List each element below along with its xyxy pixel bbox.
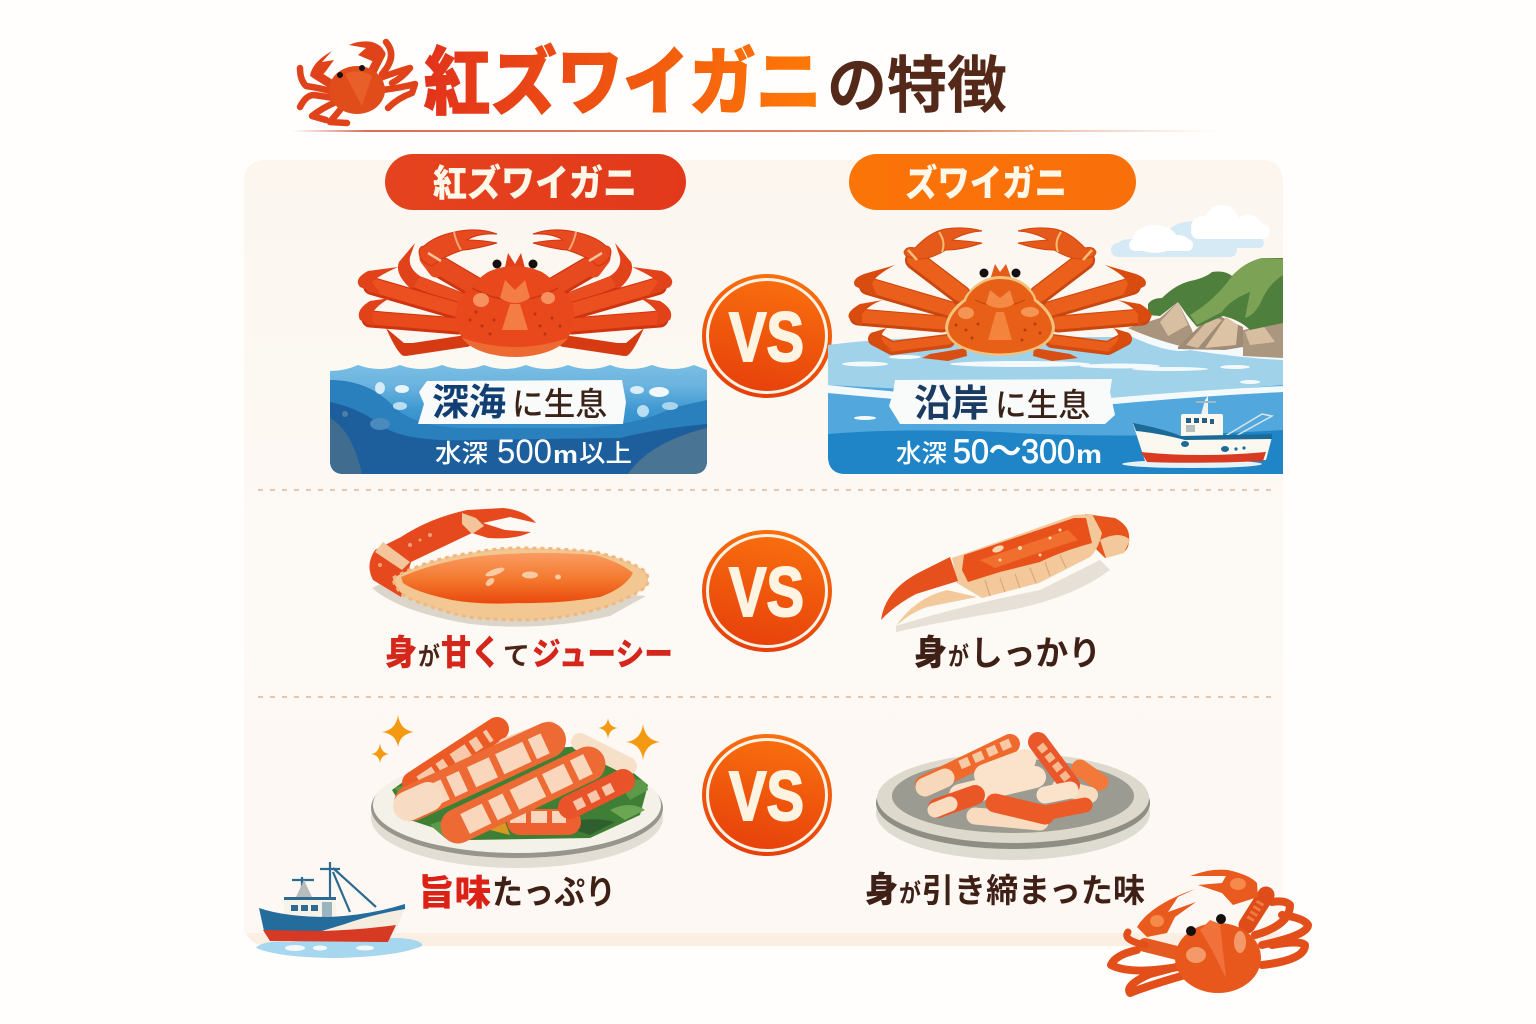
illustration: red snow crab [358, 230, 672, 357]
panel: deep sea habitat [330, 360, 707, 475]
icon: fishing boat [1122, 396, 1272, 468]
headland [1128, 258, 1283, 358]
illustration: plate with juicy crab meat [371, 715, 663, 868]
text: 身が甘くてジューシー [385, 634, 673, 673]
label: 水深 500m以上 [435, 433, 632, 471]
text: 身が甘くてジューシー: 身 [385, 634, 417, 673]
text: 旨味たっぷり [418, 872, 616, 913]
VS badge 1 [702, 274, 832, 398]
label: 沿岸に生息: 沿岸 [914, 383, 989, 424]
illustration: slim claw (snow crab) [881, 514, 1130, 632]
icon: boat bottom left [256, 862, 422, 958]
crab sticks [408, 728, 628, 826]
header pill: 紅ズワイガニ [385, 154, 686, 210]
label: 沿岸に生息 [914, 383, 1090, 424]
text: 身がしっかり: 身 [914, 634, 947, 673]
header pill: 紅ズワイガニ: 紅ズワイガニ [433, 162, 637, 204]
label: 水深 500m以上: 以上 [579, 440, 632, 468]
label: 水深 50〜300m: 50〜300 [953, 433, 1075, 471]
label: 水深 500m以上: m [553, 442, 578, 469]
label: 深海に生息: に生息 [512, 386, 607, 422]
VS badge 2 [702, 530, 832, 652]
greens [392, 745, 648, 840]
title with crab icon [300, 41, 1007, 124]
text: 身が引き締まった味: が [899, 879, 921, 908]
illustration: snow crab [848, 228, 1152, 361]
text: 身が甘くてジューシー: ジューシー [532, 636, 673, 672]
title: の特徴: の特徴 [827, 52, 1007, 121]
text: 身が甘くてジューシー: て [503, 641, 530, 671]
label: torn paper [889, 379, 1115, 424]
VS badge 3 [702, 734, 832, 856]
text: 身が甘くてジューシー: 甘く [441, 634, 501, 673]
text: 身がしっかり: が [948, 642, 969, 671]
panel: coastal habitat [828, 205, 1283, 477]
illustration: plate with firm crab meat [876, 742, 1150, 860]
text: 身が引き締まった味: 身 [865, 871, 898, 910]
text: 身がしっかり: しっかり [970, 635, 1101, 673]
label: 深海に生息: 深海 [432, 382, 506, 423]
VS badge 3: VS [729, 757, 804, 835]
label: 沿岸に生息: に生息 [995, 387, 1090, 423]
panel: comparison background [244, 160, 1283, 946]
label: 深海に生息 [432, 382, 607, 423]
header pill: ズワイガニ [849, 154, 1136, 210]
title: 紅ズワイガニ: 紅ズワイガニ [424, 41, 822, 124]
text: 身が引き締まった味: 引き締まった味 [922, 872, 1145, 909]
text: 旨味たっぷり: 旨味 [418, 872, 491, 913]
icon: title crab [300, 41, 415, 123]
header pill: ズワイガニ: ズワイガニ [905, 162, 1067, 204]
VS badge 1: VS [729, 298, 804, 376]
sparkles [371, 715, 660, 763]
text: 身が甘くてジューシー: が [418, 642, 440, 671]
icon: crab bottom right [1111, 870, 1308, 993]
illustration: thick claw (red snow crab) [369, 508, 648, 627]
label: torn paper [418, 380, 626, 424]
text: 身がしっかり [914, 634, 1101, 673]
label: 水深 50〜300m: m [1076, 441, 1102, 469]
VS badge 2: VS [729, 553, 804, 631]
label: 水深 50〜300m: 水深 [896, 440, 947, 468]
label: 水深 500m以上: 水深 [435, 440, 488, 468]
label: 水深 50〜300m [896, 433, 1102, 471]
label: 水深 500m以上: 500 [497, 433, 552, 471]
clouds [1111, 205, 1270, 257]
text: 旨味たっぷり: たっぷり [492, 874, 616, 912]
